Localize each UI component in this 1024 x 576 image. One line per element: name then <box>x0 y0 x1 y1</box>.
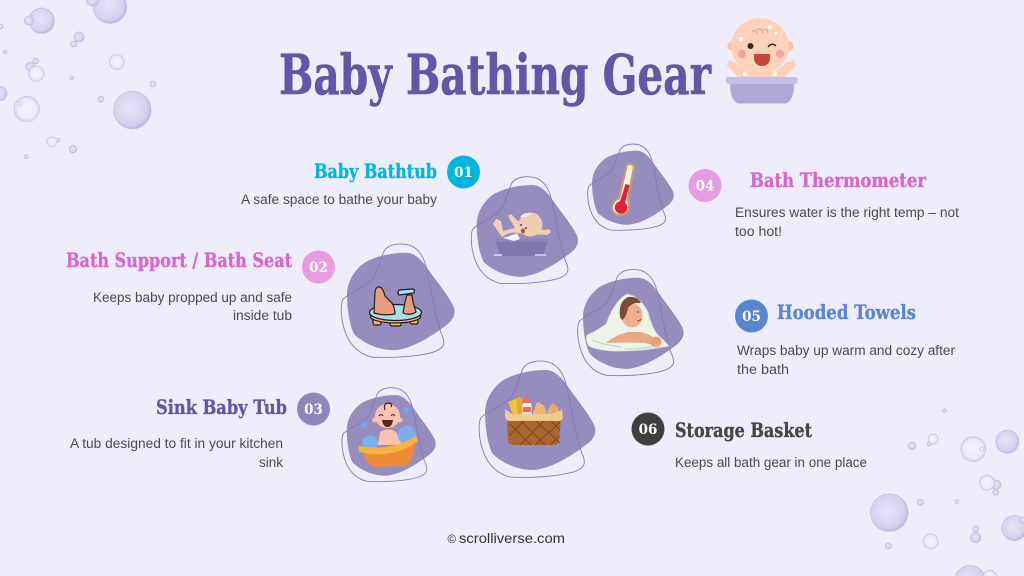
heading: hooded towels: Hooded Towels <box>777 300 916 324</box>
panel: bath support <box>66 248 335 323</box>
description: sink <box>259 455 283 470</box>
description: A tub designed to fit in your kitchen <box>70 436 283 451</box>
panel: baby bathtub <box>241 156 480 207</box>
description <box>737 343 955 377</box>
number 02: 02 <box>309 260 328 276</box>
blob: bathtub <box>471 177 578 284</box>
description: Keeps all bath gear in one place <box>675 455 867 470</box>
number 05: 05 <box>742 309 761 325</box>
blob: basket <box>479 361 595 477</box>
panel: sink baby tub <box>70 392 330 470</box>
description: inside tub <box>233 308 292 323</box>
description: A safe space to bathe your baby <box>241 192 437 207</box>
number 01 <box>447 156 480 188</box>
icon: storage basket <box>505 395 563 445</box>
footer: credit <box>448 531 565 546</box>
number 04 <box>688 169 722 202</box>
icon: baby in hooded towel <box>586 294 669 351</box>
heading: sink baby tub: Sink Baby Tub <box>156 395 287 419</box>
blob: thermometer <box>588 144 674 230</box>
site name: scrolliverse.com <box>459 531 565 546</box>
icon: bath seat <box>370 287 422 326</box>
panel: hooded towels <box>735 300 955 377</box>
copyright mark: © <box>448 534 456 546</box>
description <box>735 205 959 239</box>
heading: baby bathtub: Baby Bathtub <box>314 159 437 183</box>
number 02 <box>302 250 335 284</box>
description: Ensures water is the right temp – not <box>735 205 959 220</box>
description <box>93 290 292 323</box>
number 06: 06 <box>639 422 657 438</box>
number 06 <box>632 412 664 446</box>
title: Baby Bathing Gear <box>279 42 712 107</box>
number 03: 03 <box>304 402 323 418</box>
description: too hot! <box>735 224 782 239</box>
heading: bath support: Bath Support / Bath Seat <box>66 248 293 272</box>
bubbles: top left <box>0 0 156 159</box>
number 01: 01 <box>454 165 473 181</box>
blob: bath seat <box>341 244 455 357</box>
icon: baby in bath basin <box>726 18 798 104</box>
description: the bath <box>737 362 789 377</box>
number 03 <box>297 392 330 426</box>
panel: bath thermometer <box>688 168 959 239</box>
heading: bath thermometer: Bath Thermometer <box>750 168 926 192</box>
blob: sink tub <box>342 388 436 482</box>
number 04: 04 <box>696 178 714 194</box>
description <box>70 436 283 470</box>
bubbles: bottom right <box>871 409 1024 576</box>
panel: storage basket <box>632 412 867 470</box>
description: Wraps baby up warm and cozy after <box>737 343 955 358</box>
icon: thermometer <box>611 162 635 216</box>
blob: towel <box>578 270 684 376</box>
icon: baby in sink tub <box>358 403 418 467</box>
number 05 <box>735 300 768 332</box>
description: Keeps baby propped up and safe <box>93 290 292 305</box>
icon: baby in bathtub <box>493 212 551 256</box>
heading: storage basket: Storage Basket <box>675 418 813 442</box>
